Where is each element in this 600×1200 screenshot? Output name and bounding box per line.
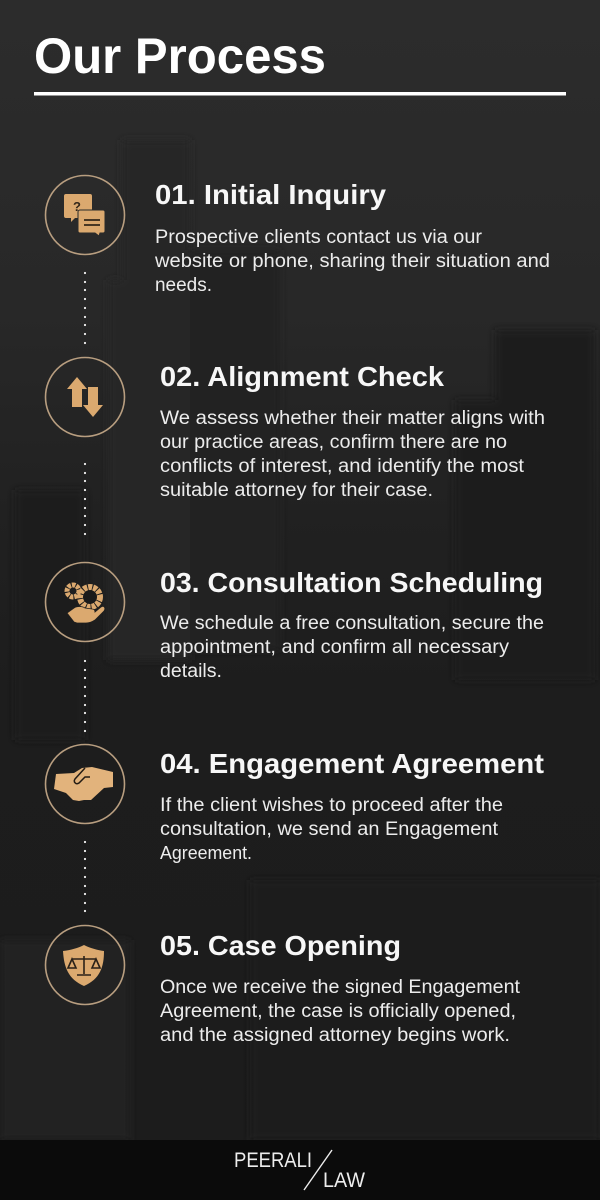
body 02: our practice areas, confirm there are no (160, 432, 507, 453)
connector dots 3-4 (84, 660, 86, 732)
icon: speech bubbles: ? (73, 199, 81, 214)
body 01 (154, 227, 550, 296)
body 02: We assess whether their matter aligns with (160, 408, 545, 429)
title: Our Process (34, 28, 326, 84)
heading 04: 04. Engagement Agreement (160, 748, 544, 779)
body 04 (160, 795, 503, 863)
icon: up and down arrows (46, 358, 124, 436)
icon: gears over hand (46, 562, 124, 642)
logo: Peerali Law (234, 1149, 365, 1192)
body 01: needs. (155, 275, 212, 296)
connector dots 2-3 (84, 463, 86, 535)
icon: handshake (46, 744, 124, 824)
body 02 (160, 408, 545, 501)
body 02: conflicts of interest, and identify the most (160, 456, 525, 477)
body 05: Once we receive the signed Engagement (160, 977, 521, 998)
logo: Peerali Law: LAW (323, 1169, 365, 1192)
body 03: We schedule a free consultation, secure the (160, 613, 544, 634)
footer bar (0, 1140, 600, 1200)
step 5 (46, 926, 521, 1046)
heading 05: 05. Case Opening (160, 930, 401, 961)
icon: shield with scales (46, 926, 124, 1004)
body 05: and the assigned attorney begins work. (160, 1025, 510, 1046)
connector dots 1-2 (84, 272, 86, 344)
body 04: If the client wishes to proceed after the (160, 795, 503, 816)
title rule (34, 92, 566, 96)
heading 01: 01. Initial Inquiry (155, 179, 386, 210)
logo: Peerali Law: PEERALI (234, 1149, 312, 1172)
body 01: Prospective clients contact us via our (155, 227, 483, 248)
body 01: website or phone, sharing their situation and (154, 251, 550, 272)
connector dots 4-5 (84, 841, 86, 912)
body 05: Agreement, the case is officially opened, (160, 1001, 516, 1022)
body 04: consultation, we send an Engagement (160, 819, 499, 840)
step 4 (46, 744, 544, 863)
step 1 (46, 176, 550, 296)
step 3 (46, 562, 544, 682)
body 04: Agreement. (160, 843, 252, 863)
heading 03: 03. Consultation Scheduling (160, 567, 543, 598)
icon: speech bubbles (46, 176, 124, 254)
body 05 (160, 977, 521, 1046)
heading 02: 02. Alignment Check (160, 361, 444, 392)
body 03: details. (160, 661, 222, 682)
body 02: suitable attorney for their case. (160, 480, 433, 501)
body 03: appointment, and confirm all necessary (160, 637, 510, 658)
step 2 (46, 358, 545, 501)
body 03 (160, 613, 544, 682)
